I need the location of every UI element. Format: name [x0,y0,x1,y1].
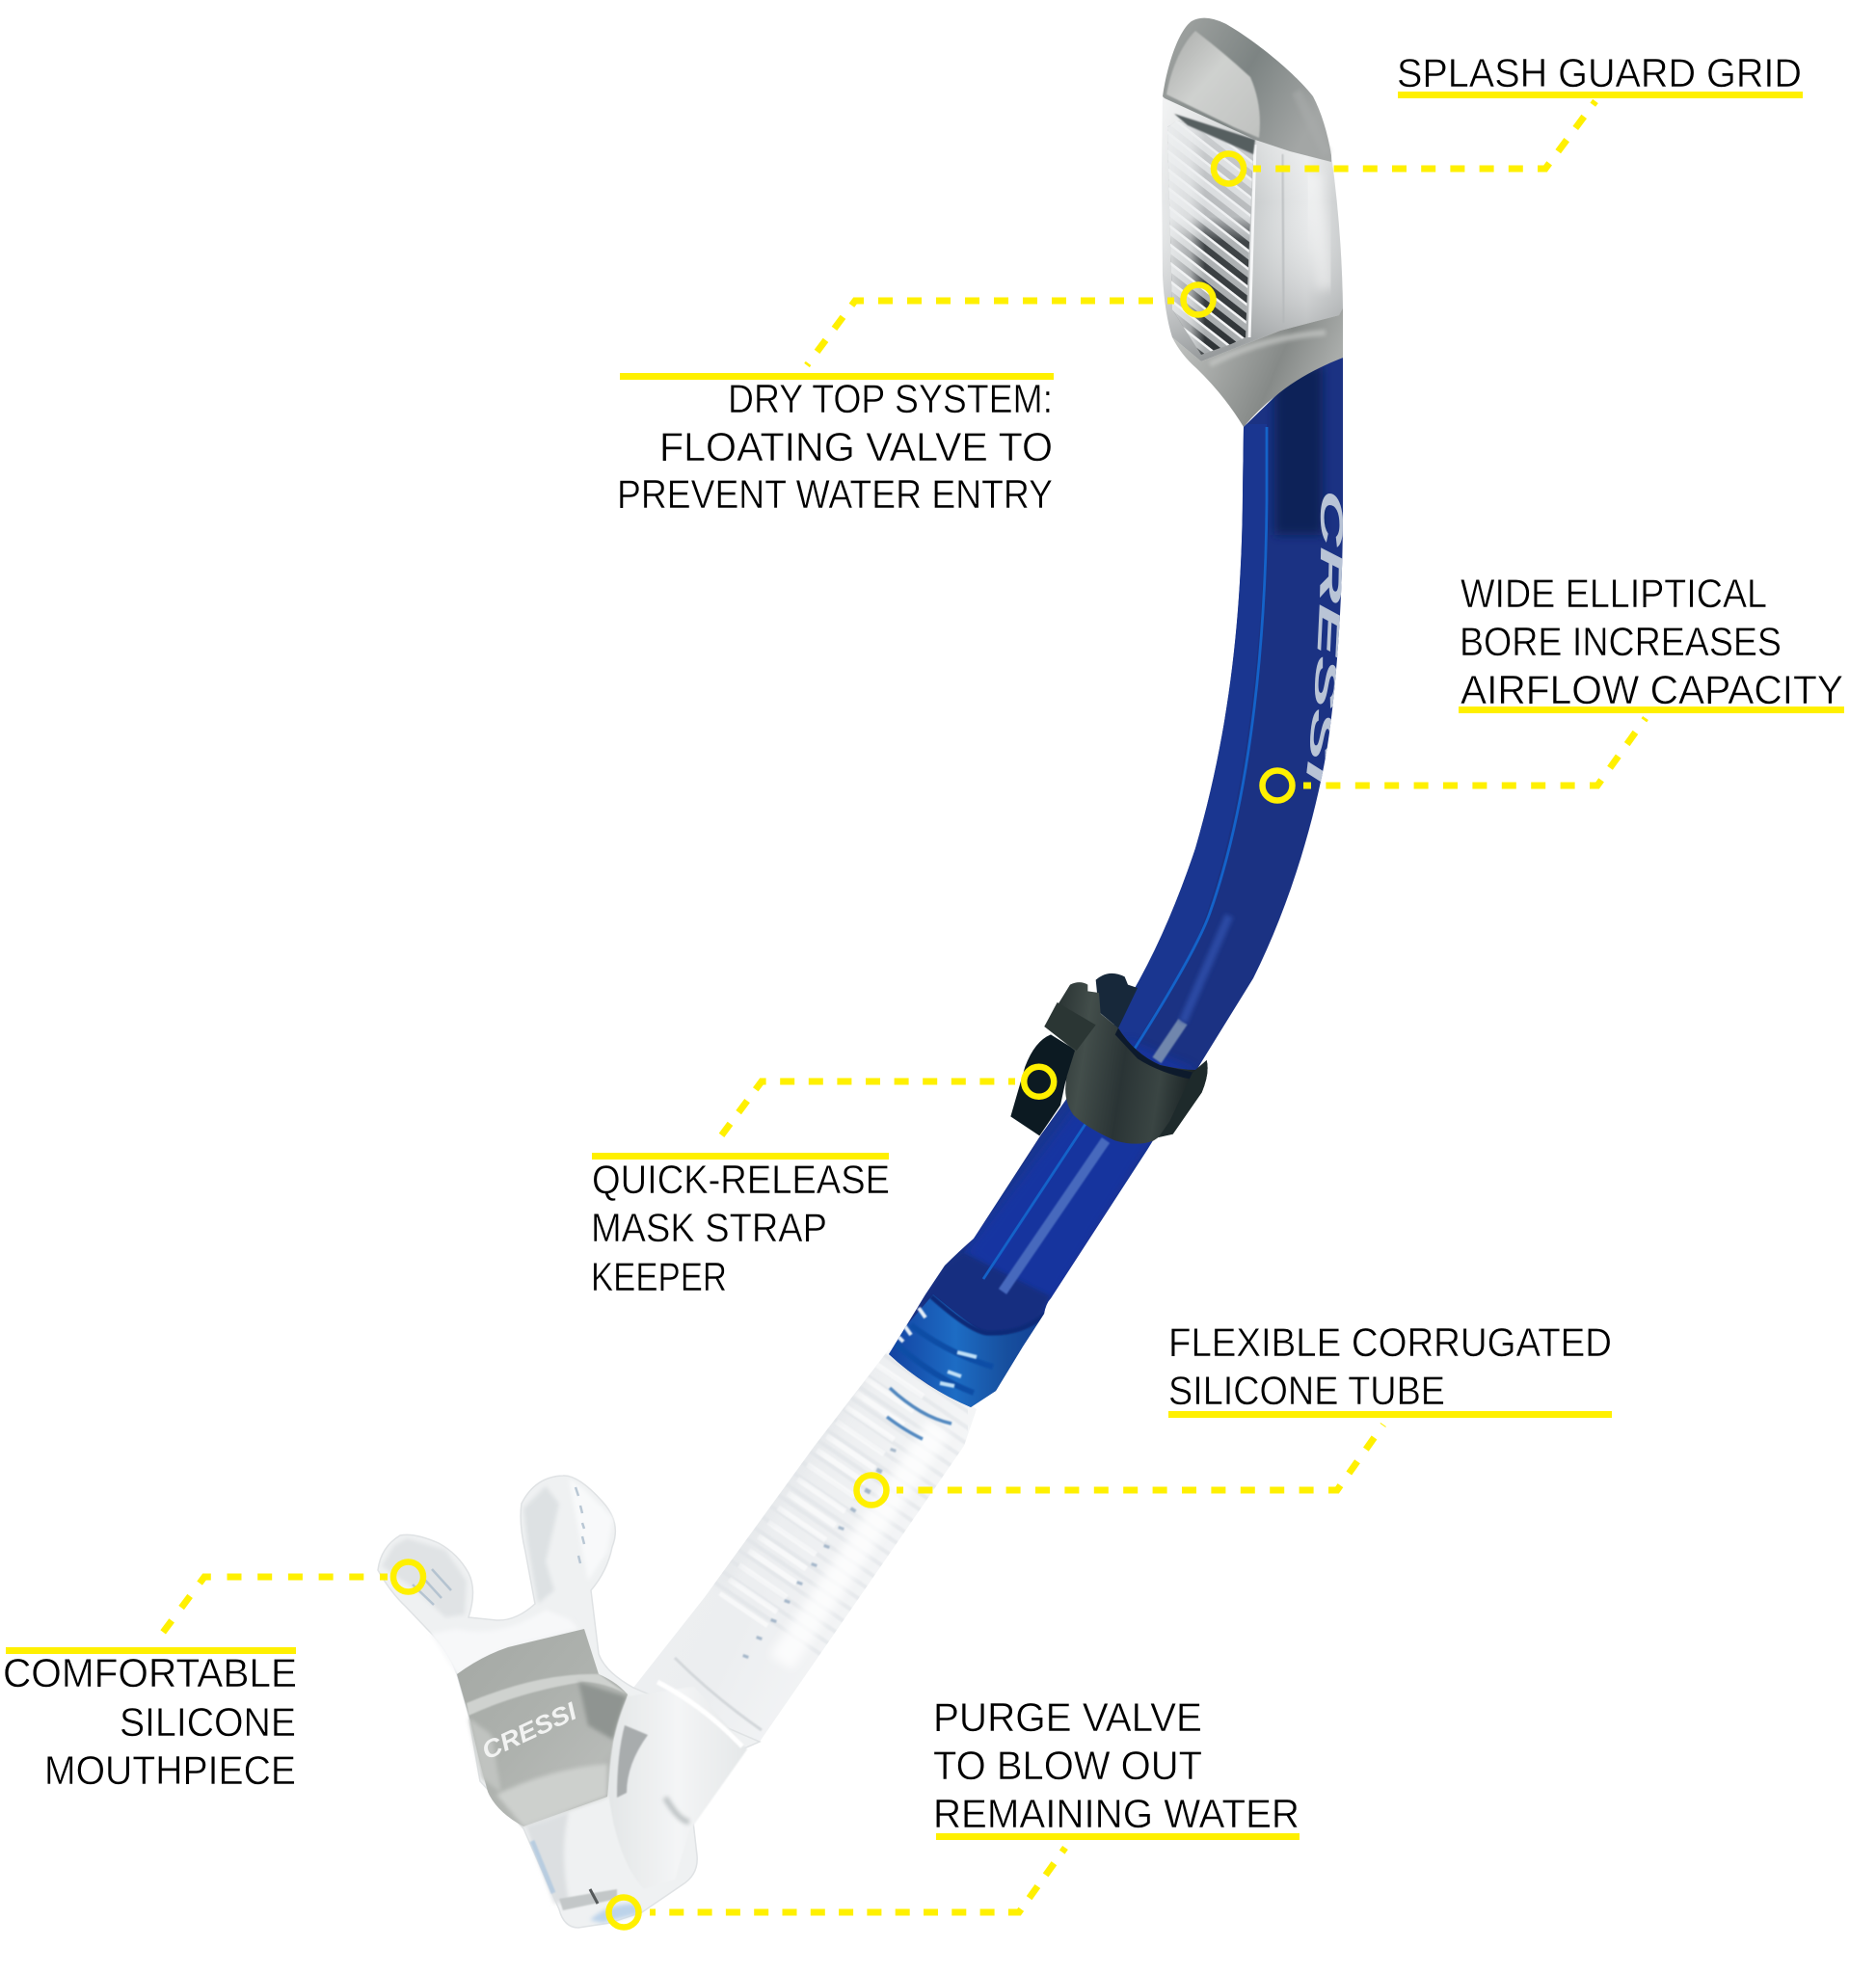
underline [592,1153,889,1160]
grey top cap [1163,18,1331,162]
clear corrugated silicone tube [634,1353,977,1741]
blue rings on clear tube [887,1388,951,1439]
underline [936,1833,1300,1840]
leader line [714,1081,1015,1145]
label text [1168,1320,1612,1413]
label text [617,376,1053,517]
top section: splash guard window [1162,18,1343,427]
label text: PREVENT WATER ENTRY [617,471,1053,517]
callout: comfortable silicone mouthpiece [3,1561,423,1793]
top tabs [1096,973,1138,1028]
label text: SILICONE [120,1699,296,1745]
callout: flexible corrugated silicone tube [856,1320,1612,1506]
label text [933,1694,1300,1836]
label text: BORE INCREASES [1460,619,1782,664]
silver mouthpiece bite plate [457,1629,628,1826]
leader line [156,1577,388,1641]
rear latch [1010,1034,1077,1135]
leader line [1303,718,1646,786]
callout: purge valve [609,1694,1300,1928]
mouthpiece and purge chamber silhouette [378,1476,760,1928]
leader line [1253,101,1595,169]
label text: MASK STRAP [591,1205,827,1250]
label text: FLEXIBLE CORRUGATED [1168,1320,1612,1365]
label text: QUICK-RELEASE [592,1157,890,1202]
callout: splash guard grid [1214,50,1803,183]
marker ring [856,1475,887,1506]
snorkel illustration [377,17,1357,1931]
underline [620,373,1054,380]
underline [6,1647,296,1654]
callout: quick-release mask strap keeper [591,1067,1054,1299]
label text: MOUTHPIECE [44,1747,296,1793]
teeth marks [413,1487,584,1605]
underline [1459,707,1844,713]
purge chamber details [608,1687,747,1889]
label text: TO BLOW OUT [933,1743,1202,1788]
marker ring [1263,771,1292,800]
bright blue ring end [889,1294,1042,1407]
leader line [897,1425,1383,1490]
underline [1168,1411,1612,1418]
blue dry-top tube [889,358,1343,1407]
marker ring [1184,285,1213,314]
leader line [807,301,1174,365]
label text: REMAINING WATER [933,1791,1300,1836]
label text: SPLASH GUARD GRID [1397,50,1802,95]
band top lip [1115,1028,1195,1080]
upper dark core [1274,366,1323,535]
underline [1398,92,1803,98]
callout: wide elliptical bore [1263,571,1844,800]
label text: AIRFLOW CAPACITY [1461,667,1843,712]
label text: DRY TOP SYSTEM: [728,376,1053,421]
label text: PURGE VALVE [933,1694,1202,1740]
leader line [650,1848,1065,1912]
label text [1460,571,1843,712]
mask strap keeper clip [1010,973,1208,1144]
left face tint [964,424,1267,1272]
callout: dry top system [617,285,1213,517]
marker ring [1024,1067,1054,1097]
label text: FLOATING VALVE TO [659,424,1053,469]
lower tube brighter [964,1041,1195,1314]
label text [3,1650,297,1793]
label text: SILICONE TUBE [1168,1368,1445,1413]
flange shading [382,1538,467,1617]
marker ring [1214,154,1244,183]
label text: KEEPER [591,1254,727,1299]
label text [591,1157,890,1299]
marker ring [393,1561,423,1592]
blue marks along the tube [745,1449,894,1658]
mouthpiece logo: CRESSI [477,1696,581,1765]
label text: WIDE ELLIPTICAL [1461,571,1767,616]
slotted grid [1167,120,1253,355]
tube logo: CRESSI [1306,493,1343,782]
silver collar [1172,308,1343,427]
marker ring [609,1897,638,1928]
label text: COMFORTABLE [3,1650,297,1695]
bright internal ribs [983,427,1267,1279]
